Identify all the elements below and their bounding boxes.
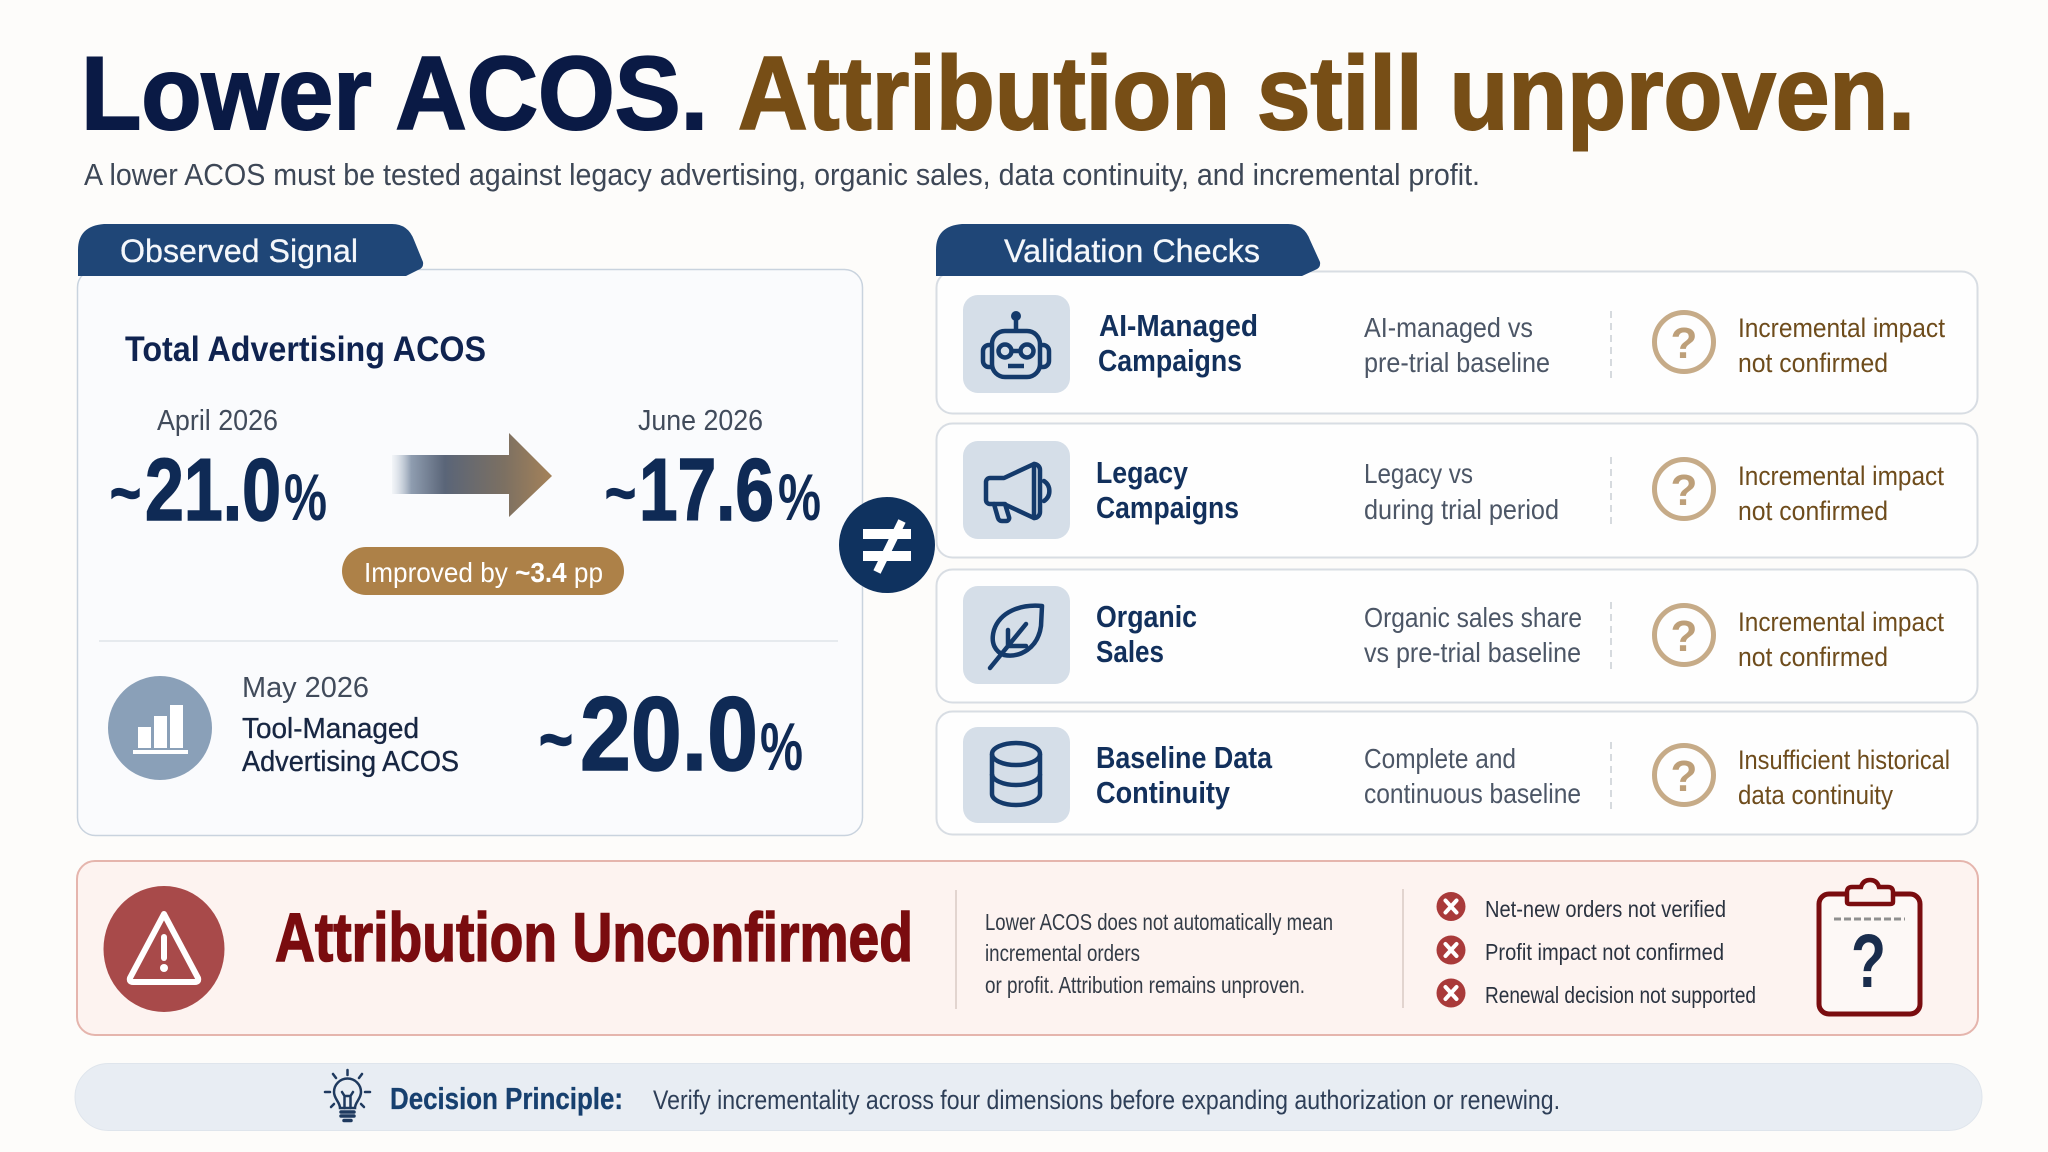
panel: decision principle — [75, 1064, 1982, 1130]
row: organic sales — [936, 570, 1978, 702]
heading tab: observed signal: Observed Signal — [120, 233, 358, 269]
row: organic sales: Sales — [1096, 634, 1164, 669]
icon: not equal — [839, 497, 935, 593]
list: unverified outcomes: Profit impact not confirmed — [1485, 939, 1724, 965]
row: organic sales: vs pre-trial baseline — [1364, 637, 1581, 668]
icon: bar chart — [108, 676, 212, 780]
june value: ~ — [605, 459, 636, 528]
panel: attribution unconfirmed banner — [77, 861, 1978, 1035]
may label: Advertising ACOS — [242, 746, 459, 778]
row: AI-managed campaigns — [936, 272, 1978, 414]
icon: robot — [963, 295, 1070, 393]
icon: question: ? — [1671, 752, 1697, 801]
icon: question: ? — [1671, 319, 1697, 368]
icon: light bulb — [325, 1070, 370, 1120]
may value: % — [760, 709, 803, 785]
row: baseline data continuity: continuous baseline — [1364, 778, 1581, 809]
icon: question: ? — [1671, 612, 1697, 661]
label: decision principle: Decision Principle: — [390, 1081, 623, 1116]
row: organic sales: not confirmed — [1738, 642, 1888, 672]
icon: question — [1654, 460, 1714, 518]
list: unverified outcomes — [1436, 892, 1756, 1008]
row: baseline data continuity: Insufficient historical — [1738, 745, 1950, 775]
icon: clipboard: ? — [1851, 919, 1886, 1004]
may value: 20.0 — [580, 676, 758, 793]
april value — [110, 405, 327, 539]
panel: observed signal — [78, 224, 862, 836]
heading tab: observed signal — [78, 224, 423, 276]
row: AI-managed campaigns: pre-trial baseline — [1364, 347, 1550, 378]
row: organic sales: Organic — [1096, 599, 1197, 634]
may label — [242, 672, 459, 778]
row: AI-managed campaigns: Incremental impact — [1738, 313, 1945, 343]
row: AI-managed campaigns: not confirmed — [1738, 348, 1888, 378]
row: AI-managed campaigns: AI-managed vs — [1364, 312, 1533, 343]
row: legacy campaigns — [936, 424, 1978, 558]
may label: Tool-Managed — [242, 713, 419, 745]
row: organic sales: Organic sales share — [1364, 602, 1582, 633]
row: baseline data continuity: data continuity — [1738, 780, 1893, 810]
row: baseline data continuity: Baseline Data — [1096, 740, 1273, 775]
row: legacy campaigns: Legacy vs — [1364, 458, 1473, 489]
row: organic sales: Incremental impact — [1738, 607, 1944, 637]
may label: May 2026 — [242, 672, 369, 704]
badge: improvement: Improved by ~3.4 pp — [364, 557, 603, 588]
icon: question — [1654, 606, 1714, 664]
subtitle: A lower ACOS must be tested against legacy advertising, organic sales, data continuity, and incremental profit. — [84, 157, 1480, 192]
icon: question — [1654, 746, 1714, 804]
text: decision principle statement: Verify incrementality across four dimensions before expanding authorization or renewing. — [653, 1085, 1560, 1115]
arrow: april to june — [392, 433, 552, 517]
april value: % — [284, 460, 327, 534]
list: unverified outcomes: Renewal decision not supported — [1485, 982, 1756, 1008]
row: baseline data continuity — [936, 712, 1978, 834]
april value: 21.0 — [145, 440, 281, 539]
banner description: or profit. Attribution remains unproven. — [985, 972, 1305, 998]
heading tab: validation checks: Validation Checks — [1004, 233, 1260, 269]
row: baseline data continuity: Continuity — [1096, 775, 1231, 810]
april value: April 2026 — [157, 405, 278, 437]
row: AI-managed campaigns: AI-Managed — [1099, 308, 1258, 343]
icon: question: ? — [1671, 466, 1697, 515]
row: legacy campaigns: Incremental impact — [1738, 461, 1944, 491]
row: legacy campaigns: Campaigns — [1096, 490, 1239, 525]
june value: % — [778, 460, 821, 534]
may value: ~ — [539, 700, 573, 778]
panel heading: total advertising ACOS: Total Advertising ACOS — [125, 330, 486, 369]
icon: warning — [104, 886, 224, 1012]
badge: improvement — [342, 547, 624, 595]
april value: ~ — [110, 459, 141, 528]
june value — [605, 405, 821, 539]
june value: June 2026 — [638, 405, 763, 437]
title: Attribution still unproven. — [738, 36, 1915, 152]
banner description — [985, 909, 1333, 998]
icon: database — [963, 727, 1070, 823]
banner description: incremental orders — [985, 940, 1140, 966]
heading tab: validation checks — [936, 224, 1320, 276]
banner description: Lower ACOS does not automatically mean — [985, 909, 1333, 935]
row: legacy campaigns: during trial period — [1364, 494, 1559, 525]
icon: clipboard — [1819, 880, 1920, 1014]
row: AI-managed campaigns: Campaigns — [1098, 343, 1242, 378]
list: unverified outcomes: Net-new orders not verified — [1485, 896, 1726, 922]
row: baseline data continuity: Complete and — [1364, 743, 1516, 774]
icon: leaf — [963, 586, 1070, 684]
title: Lower ACOS. — [81, 36, 708, 152]
row: legacy campaigns: Legacy — [1096, 455, 1189, 490]
june value: 17.6 — [639, 440, 774, 539]
row: legacy campaigns: not confirmed — [1738, 496, 1888, 526]
icon: megaphone — [963, 441, 1070, 539]
icon: question — [1654, 312, 1714, 372]
banner heading: Attribution Unconfirmed — [275, 899, 913, 976]
